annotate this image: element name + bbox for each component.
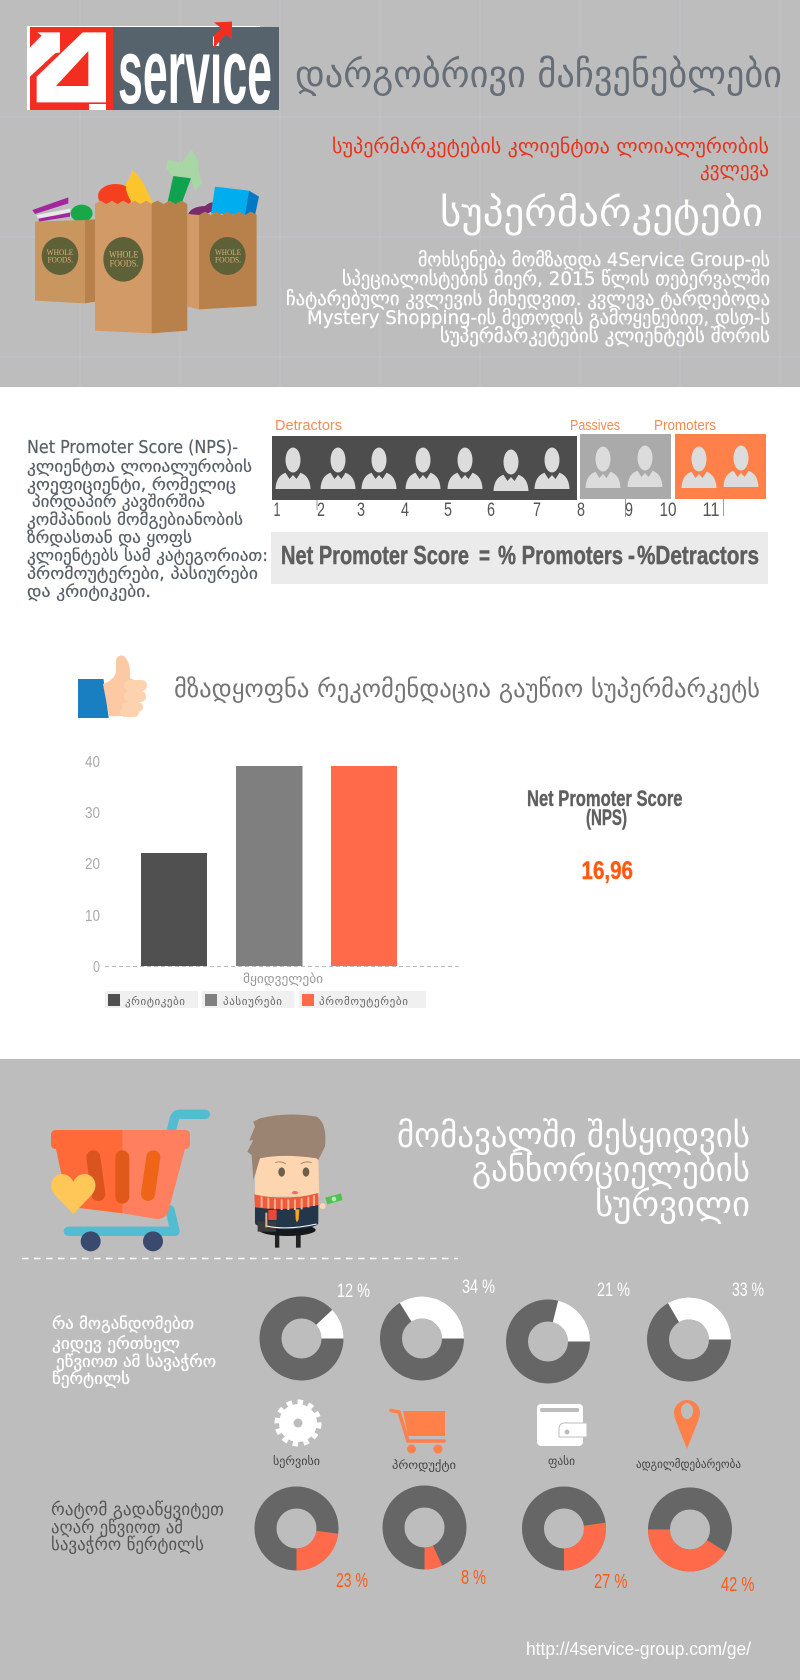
heading: future purchase intent: განხორციელების (472, 1150, 750, 1190)
intro paragraph: Mystery Shopping-ის მეთოდის გამოყენებით, დსთ-ს (307, 307, 770, 329)
bottom donut percentages: 27 % (594, 1571, 628, 1593)
NPS scale labels: Passives (570, 417, 620, 434)
subtitle: სუპერმარკეტების კლიენტთა ლოიალურობის (332, 134, 769, 158)
subtitle: კვლევა (700, 157, 769, 181)
NPS description: კლიენტებს სამ კატეგორიათ: (27, 546, 268, 565)
logo: 4Service (27, 21, 279, 123)
NPS description: კომპანიის მომგებიანობის (27, 510, 243, 529)
NPS description: და კრიტიკები. (27, 582, 151, 601)
NPS scale labels: Detractors (275, 417, 342, 434)
bar chart: 30 (85, 805, 100, 822)
bar chart: 20 (85, 856, 100, 873)
NPS scale numbers: 8 (577, 500, 585, 521)
chart legend: პასიურები (223, 995, 282, 1008)
NPS formula: Net Promoter Score (281, 540, 469, 570)
website url: http://4service-group.com/ge/ (526, 1639, 751, 1659)
heading: future purchase intent: მომავალში შესყიდვის (397, 1116, 750, 1156)
heading: supermarkets: სუპერმარკეტები (440, 191, 763, 236)
top donut percentages: 34 % (462, 1277, 495, 1298)
chart legend (105, 991, 426, 1008)
NPS description: ზრდასთან და ყოფს (27, 528, 192, 547)
NPS scale labels: Promoters (654, 417, 716, 434)
question: reasons to stop: აღარ ეწვიოთ ამ (51, 1518, 183, 1538)
icon: grocery bags: FOODS. (48, 255, 73, 265)
top donut percentages (337, 1277, 764, 1302)
bar chart: მყიდველები (243, 972, 323, 987)
top donut percentages: 33 % (732, 1280, 764, 1301)
heading: recommendation: მზადყოფნა რეკომენდაცია გაუწიო სუპერმარკეტს (174, 674, 760, 703)
NPS scale numbers: 2 (317, 500, 325, 521)
icon: shopper character (247, 1115, 343, 1248)
question: return reasons: რა მოგანდომებთ (52, 1314, 194, 1333)
NPS formula: %Detractors (637, 540, 759, 570)
NPS description: კლიენტთა ლოიალურობის (27, 457, 252, 476)
panel: bottom section background (0, 1059, 800, 1680)
NPS formula: % Promoters (498, 540, 623, 570)
panel: header background (0, 0, 800, 387)
NPS scale numbers: 5 (444, 500, 452, 521)
icon: grocery bags: WHOLE (109, 250, 138, 261)
bottom donut percentages: 42 % (721, 1574, 755, 1596)
NPS scale labels (275, 417, 716, 434)
NPS description: Net Promoter Score (NPS)- (27, 437, 238, 458)
icon: product cart (391, 1410, 445, 1454)
subtitle (332, 134, 769, 181)
NPS result: (NPS) (586, 805, 627, 830)
donut chart: location 33% (647, 1297, 731, 1382)
category labels: ადგილმდებარეობა (636, 1457, 741, 1471)
NPS result: Net Promoter Score (527, 786, 682, 811)
donut chart: price 21% (510, 1304, 586, 1379)
heading: future purchase intent: სურვილი (595, 1185, 750, 1225)
NPS description: კოეფიციენტი, რომელიც (27, 475, 236, 494)
NPS scale: passives (580, 434, 671, 499)
panel: white section background (0, 387, 800, 1059)
NPS scale: promoters (675, 434, 766, 499)
NPS formula (271, 532, 768, 584)
icon: grocery bags (32, 149, 259, 333)
bottom donut percentages (336, 1567, 755, 1596)
icon: location pin (674, 1400, 700, 1449)
NPS formula: = (479, 540, 490, 570)
NPS scale numbers (274, 499, 724, 521)
question: reasons to stop (51, 1500, 224, 1555)
intro paragraph (286, 249, 770, 347)
title: დარგობრივი მაჩვენებლები (295, 53, 782, 96)
NPS description: პრომოუტერები, პასიურები (27, 564, 258, 583)
icon: shopping cart (51, 1114, 205, 1251)
bottom donut percentages: 23 % (336, 1570, 368, 1592)
bar chart (85, 754, 462, 1008)
intro paragraph: ჩატარებული კვლევის მიხედვით. კვლევა ტარდებოდა (286, 288, 770, 310)
bottom donut percentages: 8 % (461, 1567, 486, 1589)
NPS scale numbers: 1 (274, 500, 280, 521)
question: return reasons: ეწვიოთ ამ სავაჭრო (56, 1352, 216, 1371)
top donut percentages: 12 % (337, 1281, 370, 1302)
NPS description: პირდაპირ კავშირშია (32, 492, 205, 511)
donut chart: service 12% (258, 1295, 345, 1382)
bar chart: 40 (85, 754, 100, 771)
intro paragraph: სპეციალისტების მიერ, 2015 წლის თებერვალში (342, 268, 770, 290)
question: return reasons: კიდევ ერთხელ (52, 1334, 180, 1353)
NPS description (27, 437, 268, 601)
icon: grocery bags: WHOLE (47, 247, 73, 257)
bar chart: 0 (93, 959, 100, 976)
NPS formula: - (628, 540, 635, 570)
NPS result (527, 786, 682, 885)
NPS scale: detractors (272, 436, 577, 500)
NPS scale numbers: 11 (702, 500, 720, 521)
NPS scale numbers: 7 (533, 500, 541, 521)
donut chart: product 8% (383, 1486, 466, 1569)
icon: wallet (537, 1404, 587, 1446)
category labels: სერვისი (273, 1454, 320, 1468)
donut chart: location 42% (647, 1487, 733, 1572)
chart legend: პრომოუტერები (319, 995, 408, 1008)
donut chart: product 34% (379, 1296, 465, 1381)
donut chart: price 27% (529, 1493, 599, 1564)
question: reasons to stop: რატომ გადაწყვიტეთ (51, 1500, 224, 1520)
icon: grocery bags: FOODS. (110, 258, 138, 269)
heading: future purchase intent (397, 1116, 750, 1225)
icon: grocery bags: FOODS. (215, 255, 241, 265)
category labels (273, 1454, 741, 1472)
top donut percentages: 21 % (597, 1280, 630, 1301)
intro paragraph: სუპერმარკეტების კლიენტებს შორის (440, 325, 770, 347)
donut chart: service 23% (262, 1494, 331, 1563)
question: reasons to stop: სავაჭრო წერტილს (51, 1535, 204, 1555)
bar chart: 10 (85, 908, 100, 925)
intro paragraph: მოხსენება მომზადდა 4Service Group-ის (418, 249, 770, 271)
icon: grocery bags: WHOLE (215, 247, 241, 257)
question: return reasons (52, 1314, 216, 1388)
NPS scale numbers: 4 (401, 500, 409, 521)
logo: 4Service: service (118, 21, 272, 123)
question: return reasons: წერტილს (52, 1369, 130, 1388)
NPS result: 16,96 (582, 857, 633, 885)
NPS scale numbers: 10 (660, 500, 676, 521)
icon: gear (277, 1402, 319, 1444)
NPS scale numbers: 9 (625, 500, 633, 521)
category labels: პროდუქტი (392, 1458, 456, 1472)
chart legend: კრიტიკები (125, 995, 185, 1008)
icon: thumbs up (78, 656, 147, 718)
category labels: ფასი (548, 1454, 575, 1468)
NPS scale numbers: 3 (357, 500, 365, 521)
NPS scale numbers: 6 (487, 500, 495, 521)
